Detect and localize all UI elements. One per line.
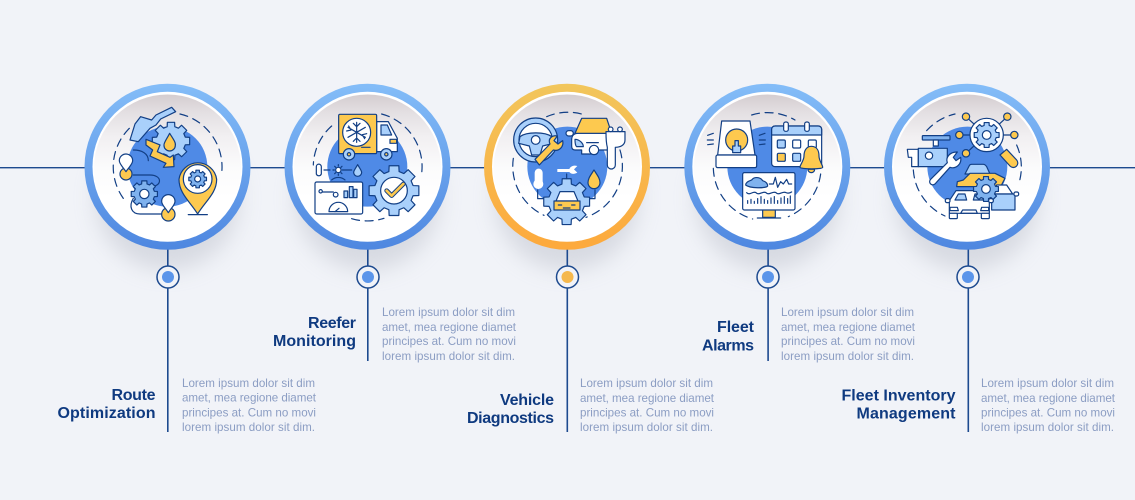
connector line bbox=[367, 240, 369, 361]
description: amet, mea regione diamet bbox=[981, 392, 1116, 405]
title: Fleet Inventory bbox=[842, 388, 956, 404]
shadow bbox=[895, 126, 1039, 270]
description: principes at. Cum no movi bbox=[182, 406, 316, 420]
timeline node bbox=[556, 266, 578, 288]
step 2: reefer monitoring bbox=[273, 84, 517, 363]
icon: reefer truck monitoring bbox=[313, 114, 422, 221]
connector line bbox=[566, 240, 568, 432]
icon: vehicle diagnostics bbox=[513, 112, 625, 225]
shadow bbox=[96, 126, 240, 270]
description: Lorem ipsum dolor sit dim bbox=[781, 306, 914, 319]
description: amet, mea regione diamet bbox=[182, 392, 317, 404]
description: principes at. Cum no movi bbox=[382, 335, 516, 348]
description: Lorem ipsum dolor sit dim bbox=[182, 377, 315, 390]
timeline node bbox=[357, 266, 379, 288]
title: Management bbox=[856, 406, 956, 422]
title bbox=[58, 387, 156, 422]
icon: route optimization bbox=[113, 107, 222, 221]
timeline node bbox=[157, 266, 179, 288]
description: lorem ipsum dolor sit dim. bbox=[781, 350, 914, 363]
description bbox=[981, 377, 1116, 434]
description: Lorem ipsum dolor sit dim bbox=[580, 377, 713, 390]
title bbox=[842, 388, 956, 422]
connector line bbox=[968, 240, 969, 432]
description: principes at. Cum no movi bbox=[580, 406, 714, 420]
title: Alarms bbox=[702, 338, 754, 354]
circle frame bbox=[84, 84, 250, 250]
description: lorem ipsum dolor sit dim. bbox=[580, 421, 713, 434]
title: Monitoring bbox=[273, 333, 356, 350]
description: lorem ipsum dolor sit dim. bbox=[382, 350, 515, 363]
shadow bbox=[495, 126, 639, 270]
circle frame bbox=[484, 84, 650, 250]
timeline node bbox=[757, 266, 779, 288]
description: lorem ipsum dolor sit dim. bbox=[182, 421, 315, 434]
description: principes at. Cum no movi bbox=[781, 335, 915, 348]
title: Reefer bbox=[308, 315, 356, 332]
step 3: vehicle diagnostics bbox=[467, 84, 715, 434]
title: Optimization bbox=[58, 405, 156, 422]
icon: fleet inventory management bbox=[907, 113, 1021, 219]
horizontal timeline line bbox=[0, 167, 1135, 168]
description bbox=[781, 306, 916, 363]
title bbox=[702, 319, 755, 354]
circle frame bbox=[884, 84, 1050, 250]
title: Diagnostics bbox=[467, 410, 554, 427]
description bbox=[382, 306, 517, 363]
icon: fleet alarms bbox=[707, 113, 823, 219]
title: Fleet bbox=[717, 319, 755, 336]
description: lorem ipsum dolor sit dim. bbox=[981, 421, 1114, 434]
description: amet, mea regione diamet bbox=[781, 321, 916, 334]
description bbox=[580, 377, 715, 434]
description bbox=[182, 377, 317, 434]
connector line bbox=[167, 240, 169, 432]
step 5: fleet inventory management bbox=[842, 84, 1116, 434]
description: Lorem ipsum dolor sit dim bbox=[382, 306, 515, 319]
title: Route bbox=[112, 387, 156, 404]
step 4: fleet alarms bbox=[684, 84, 916, 363]
circle frame bbox=[284, 84, 450, 250]
description: Lorem ipsum dolor sit dim bbox=[981, 377, 1114, 390]
description: principes at. Cum no movi bbox=[981, 406, 1115, 420]
description: amet, mea regione diamet bbox=[580, 392, 715, 405]
description: amet, mea regione diamet bbox=[382, 321, 517, 334]
step 1: route optimization bbox=[58, 84, 317, 434]
shadow bbox=[696, 126, 840, 270]
circle frame bbox=[684, 84, 850, 250]
connector line bbox=[767, 240, 769, 361]
title bbox=[273, 315, 356, 350]
title: Vehicle bbox=[500, 392, 554, 409]
shadow bbox=[296, 126, 440, 270]
title bbox=[467, 392, 554, 427]
timeline node bbox=[957, 266, 979, 288]
